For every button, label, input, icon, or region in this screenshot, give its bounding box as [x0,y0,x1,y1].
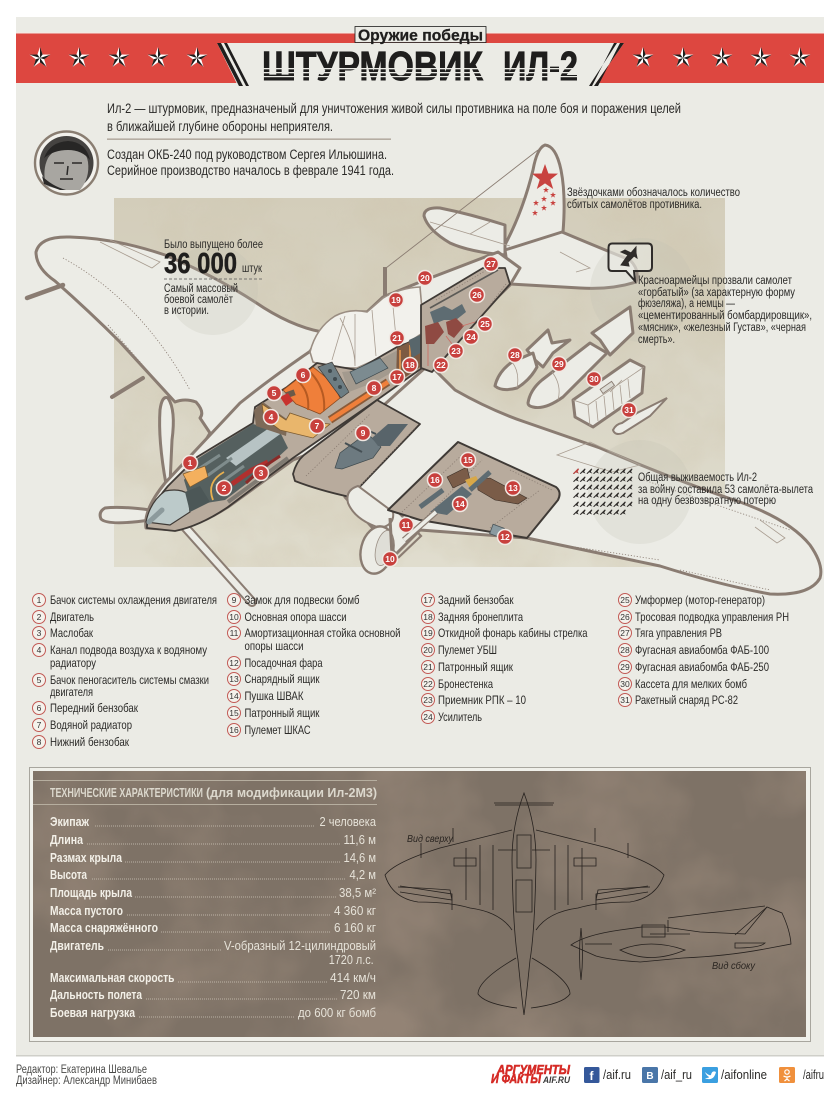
legend column 1: Бачок системы охлаждения двигателя [50,593,217,607]
specs table: Боевая нагрузка [50,1005,136,1020]
intro text: Серийное производство началось в феврале 1941 года. [107,163,394,178]
aircraft cutaway [27,145,821,602]
label: side view: Вид сбоку [712,960,756,972]
supertitle: Оружие победы [358,28,483,44]
specs table: до 600 кг бомб [298,1005,376,1020]
markers: 4 [269,412,274,422]
markers: 23 [451,346,461,356]
legend column 4: 27 [620,628,630,638]
legend column 4: Умформер (мотор-генератор) [635,593,765,607]
legend column 3: Задняя бронеплита [438,610,523,624]
lower fuel tank [330,382,388,420]
panel: technical specifications [30,768,810,1042]
bomb FAB-250 [528,307,633,408]
intro text [107,101,681,178]
bomb cassette [573,360,644,427]
engine [183,424,288,504]
legend column 2: 11 [230,628,239,638]
left stabilizer [424,208,505,255]
markers: 25 [480,319,490,329]
legend column 3: 21 [423,662,433,672]
legend column 2: 15 [229,708,239,718]
legend column 2: 16 [229,725,239,735]
legend column 4: Фугасная авиабомба ФАБ-250 [635,660,769,674]
publisher logo: АРГУМЕНТЫ [496,1062,571,1077]
specs table: Длина [50,832,84,847]
propeller upper blade [160,398,173,484]
specs table [50,814,377,1020]
legend column 2: Патронный ящик [244,706,320,720]
legend column 4: Тяга управления РВ [635,626,722,640]
twitter [702,1067,767,1083]
legend column 1: Маслобак [50,626,94,640]
stars right [632,47,810,67]
main title: ШТУРМОВИК [262,43,484,89]
legend column 2: опоры шасси [244,639,304,653]
stars left [30,47,208,67]
callout: nicknames: смерть». [638,334,675,346]
intro text: Ил-2 — штурмовик, предназначеный для уничтожения живой силы противника на поле боя и поражения целей [107,101,681,116]
legend column 2: Пулемет ШКАС [244,723,311,737]
callout: tail stars: Звёздочками обозначалось количество [567,187,740,199]
wing detail lines [100,222,785,543]
publisher logo: И ФАКТЫ [491,1071,542,1086]
markers: 27 [486,259,496,269]
facebook: /aif.ru [603,1067,631,1082]
legend column 4: Фугасная авиабомба ФАБ-100 [635,643,769,657]
specs table: Экипаж [50,814,90,829]
front fuel tank [280,367,340,414]
markers [182,256,636,566]
background texture [114,198,725,567]
footer credits: Дизайнер: Александр Минибаев [16,1075,157,1087]
blueprint: side view [571,906,791,980]
callout: production count: боевой самолёт [164,294,234,306]
specs table: 4 360 кг [334,903,376,918]
markers: 6 [301,370,306,380]
legend column 4: 26 [620,612,630,622]
callout: production count: штук [242,263,263,275]
legend column 1: Бачок пеногаситель системы смазки [50,673,209,687]
specs table: 414 км/ч [330,970,376,985]
specs table: 11,6 м [344,832,376,847]
legend column 3: Усилитель [438,710,482,724]
markers: 17 [392,372,402,382]
specs table: 6 160 кг [334,920,376,935]
legend column 4 [618,593,789,707]
specs table: Размах крыла [50,850,123,865]
facebook: f [590,1069,594,1083]
social links [584,1067,824,1083]
specs table: Двигатель [50,938,104,953]
legend column 2 [228,593,400,737]
specs table: 720 км [340,987,376,1002]
specs table: Масса пустого [50,903,123,918]
callout: production count [164,239,263,317]
legend column 3: Приемник РПК – 10 [438,693,526,707]
legend column 3: 18 [423,612,433,622]
propeller left blade [100,507,150,523]
markers: 20 [420,273,430,283]
specs table: Площадь крыла [50,885,133,900]
specs table: 1720 л.с. [329,952,374,967]
legend column 4: Ракетный снаряд РС-82 [635,693,738,707]
legend column 1: 8 [37,737,42,747]
legend column 3: 20 [423,645,433,655]
sorties pictogram [573,468,633,515]
legend column 4: Кассета для мелких бомб [635,677,747,691]
legend column 4: 28 [620,645,630,655]
legend column 1: 2 [37,612,42,622]
legend column 2: Снарядный ящик [244,672,320,686]
specs table: Масса снаряжённого [50,920,158,935]
wing armament bay [388,442,560,540]
markers: 12 [500,532,510,542]
odnoklassniki: /aifru [803,1067,824,1082]
legend column 2: Посадочная фара [244,656,323,670]
specs heading: (для модификации Ил-2М3) [206,786,377,800]
right stabilizer [505,232,637,288]
markers: 30 [589,374,599,384]
vkontakte [642,1067,692,1083]
markers: 16 [430,475,440,485]
legend column 1: Двигатель [50,610,94,624]
markers: 28 [510,350,520,360]
legend column 1: Водяной радиатор [50,718,132,732]
callout: production count: 36 000 [164,248,237,280]
armored bulkhead [318,362,349,398]
vkontakte: В [646,1071,654,1082]
callout: survivability [638,472,813,507]
translucent circles [168,238,694,544]
propeller lower blade [185,527,252,602]
legend column 1 [32,593,217,749]
callout: survivability: Общая выживаемость Ил-2 [638,472,757,484]
legend column 3: 19 [423,628,433,638]
odnoklassniki [779,1067,824,1083]
callout: nicknames: «горбатый» (за характерную форму [638,287,795,299]
markers: 5 [272,388,277,398]
specs table: V-образный 12-цилиндровый [224,938,376,953]
markers: 13 [508,483,518,493]
callout: tail stars: сбитых самолётов противника. [567,199,702,211]
specs heading [33,780,377,804]
legend column 1: 7 [37,720,42,730]
legend column 2: 12 [229,658,239,668]
markers: 21 [392,333,402,343]
legend column 3: Бронестенка [438,677,493,691]
callout: nicknames [638,275,812,346]
bomb FAB-100 [495,330,570,390]
legend column 1: Канал подвода воздуха к водяному [50,643,207,657]
legend column 3: 23 [423,695,433,705]
legend column 1: радиатору [50,656,96,670]
legend column 1: двигателя [50,685,93,699]
tail markings [532,164,558,216]
bomb [335,424,408,469]
wing guns [27,285,63,298]
callout: nicknames: фюзеляжа), а немцы — [638,298,735,310]
rear fuselage cutaway [421,268,510,372]
antenna mast and wire [385,150,538,296]
legend column 2: 14 [229,691,239,701]
legend column 4: 30 [620,679,630,689]
markers: 2 [222,483,227,493]
label: top view: Вид сверху [407,833,454,845]
legend column 3: Задний бензобак [438,593,514,607]
spinner [146,486,210,525]
portrait of Ilyushin [35,132,98,194]
tail fin [501,145,564,256]
twitter: /aifonline [721,1067,767,1082]
legend column 3: Патронный ящик [438,660,514,674]
callout: survivability: на одну безвозвратную потерю [638,495,776,507]
radiator [262,404,330,438]
callout: tail stars [567,187,740,211]
legend column 1: Нижний бензобак [50,735,130,749]
callout: nicknames: Красноармейцы прозвали самолет [638,275,793,287]
main title: ИЛ-2 [503,43,578,89]
rocket [613,398,667,434]
markers: 9 [361,428,366,438]
legend column 1: 3 [37,628,42,638]
radiator duct [254,402,288,436]
markers: 26 [472,290,482,300]
footer credits: Редактор: Екатерина Шевалье [16,1064,147,1076]
legend column 1: 5 [37,675,42,685]
legend column 2: 13 [229,674,239,684]
upper-left wing [36,237,322,450]
markers: 22 [436,360,446,370]
lower-right wing [330,360,821,594]
markers: 15 [463,455,473,465]
landing gear [347,486,421,577]
publisher logo [491,1062,571,1086]
specs table: Максимальная скорость [50,970,175,985]
legend column 2: 9 [232,595,237,605]
markers: 29 [554,359,564,369]
legend column 2: Замок для подвески бомб [244,593,360,607]
legend column 1: 4 [37,645,42,655]
facebook [584,1067,631,1083]
legend column 3: 17 [423,595,433,605]
specs table: 4,2 м [350,867,376,882]
vkontakte: /aif_ru [661,1067,692,1082]
footer credits [16,1064,157,1087]
legend column 4: Тросовая подводка управления РН [635,610,789,624]
legend column 2: Амортизационная стойка основной [244,626,400,640]
canopy [310,287,424,368]
legend column 3 [422,593,588,724]
blueprint: top view [385,793,664,1015]
markers: 3 [259,468,264,478]
legend column 3: 24 [423,712,433,722]
title banner [16,26,824,89]
fuselage [146,252,520,530]
publisher logo: AIF.RU [542,1075,571,1086]
specs table: Высота [50,867,88,882]
legend column 2: Основная опора шасси [244,610,346,624]
markers: 24 [466,332,476,342]
specs table: 2 человека [320,814,377,829]
legend column 4: 29 [620,662,630,672]
callout: production count: в истории. [164,305,209,317]
bomb bay [293,400,420,497]
legend column 2: 10 [229,612,239,622]
legend column 4: 31 [620,695,630,705]
specs table: 14,6 м [344,850,376,865]
legend column 1: Передний бензобак [50,701,139,715]
legend column 1: 6 [37,703,42,713]
specs heading: ТЕХНИЧЕСКИЕ ХАРАКТЕРИСТИКИ [50,785,203,800]
legend column 3: 22 [423,679,433,689]
legend column 3: Пулемет УБШ [438,643,497,657]
legend column 1: 1 [37,595,42,605]
rear armor and ammo [396,334,422,378]
legend column 3: Откидной фонарь кабины стрелка [438,626,588,640]
markers: 31 [624,405,634,415]
intro text: в ближайшей глубине обороны неприятеля. [107,119,333,134]
markers: 10 [385,554,395,564]
specs table: Дальность полета [50,987,143,1002]
markers: 18 [405,360,415,370]
markers: 1 [188,458,193,468]
callout: production count: Самый массовый [164,283,238,295]
markers: 11 [402,520,411,530]
markers: 14 [455,499,465,509]
intro text: Создан ОКБ-240 под руководством Сергея Ильюшина. [107,147,387,162]
cutaway interior forward [147,338,422,531]
markers: 7 [315,421,320,431]
callout: production count: Было выпущено более [164,239,263,251]
specs table: 38,5 м² [339,885,377,900]
legend column 2: Пушка ШВАК [244,689,304,703]
legend column 4: 25 [620,595,630,605]
speech bubble icon [608,244,652,281]
cockpit interior [342,350,398,392]
markers: 19 [391,295,401,305]
markers: 8 [372,383,377,393]
